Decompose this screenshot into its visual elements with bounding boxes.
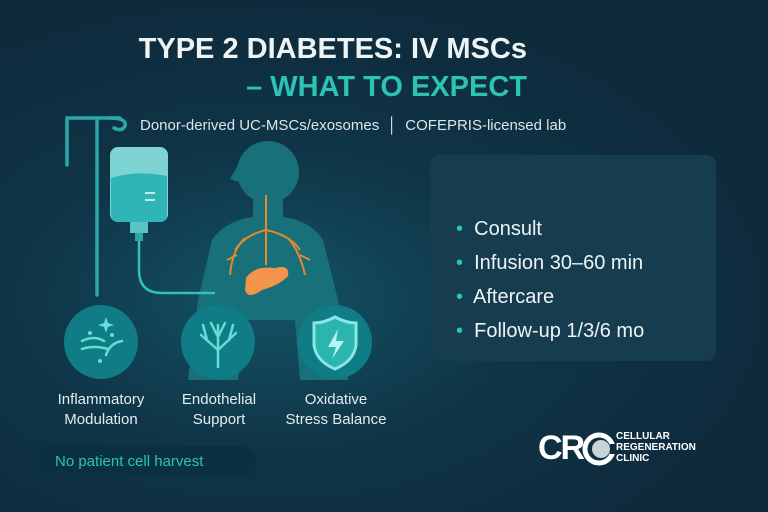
step list: • Follow-up 1/3/6 mo <box>456 320 644 342</box>
title: TYPE 2 DIABETES: IV MSCs <box>139 33 527 65</box>
step list: • Consult <box>456 218 542 240</box>
logo: CR <box>538 429 583 467</box>
panel: steps <box>430 155 716 361</box>
icon: IV pole <box>67 118 125 295</box>
label: oxidative: Stress Balance <box>286 411 386 428</box>
logo: CLINIC <box>616 453 649 464</box>
label: inflammatory: Inflammatory <box>58 391 144 408</box>
icon: IV bag <box>110 147 215 293</box>
step list: • Aftercare <box>456 286 554 308</box>
label: inflammatory: Modulation <box>64 411 138 428</box>
illustration: IV and person <box>65 116 348 380</box>
icon: shield <box>298 305 372 379</box>
label: inflammatory <box>58 391 144 428</box>
icons row <box>58 305 386 428</box>
icon: inflammatory <box>64 305 138 379</box>
icon: endothelial <box>181 305 255 379</box>
step list: • Infusion 30–60 min <box>456 252 643 274</box>
step list <box>456 218 644 342</box>
subtitle: Donor-derived UC-MSCs/exosomes │ COFEPRIS-licensed lab <box>140 117 566 134</box>
logo: CELLULAR <box>616 431 670 442</box>
label: endothelial: Support <box>193 411 245 428</box>
label: oxidative <box>286 391 386 428</box>
pill: no patient cell harvest <box>33 446 257 478</box>
person silhouette <box>188 141 348 380</box>
title <box>138 33 527 103</box>
label: endothelial <box>182 391 256 428</box>
label: oxidative: Oxidative <box>305 391 367 408</box>
pill: no patient cell harvest: No patient cell harvest <box>55 453 203 470</box>
label: endothelial: Endothelial <box>182 391 256 408</box>
icon: pancreas <box>245 267 288 295</box>
title: – WHAT TO EXPECT <box>246 71 527 103</box>
logo <box>538 429 696 467</box>
bronchial tree <box>227 195 310 275</box>
logo: REGENERATION <box>616 442 696 453</box>
